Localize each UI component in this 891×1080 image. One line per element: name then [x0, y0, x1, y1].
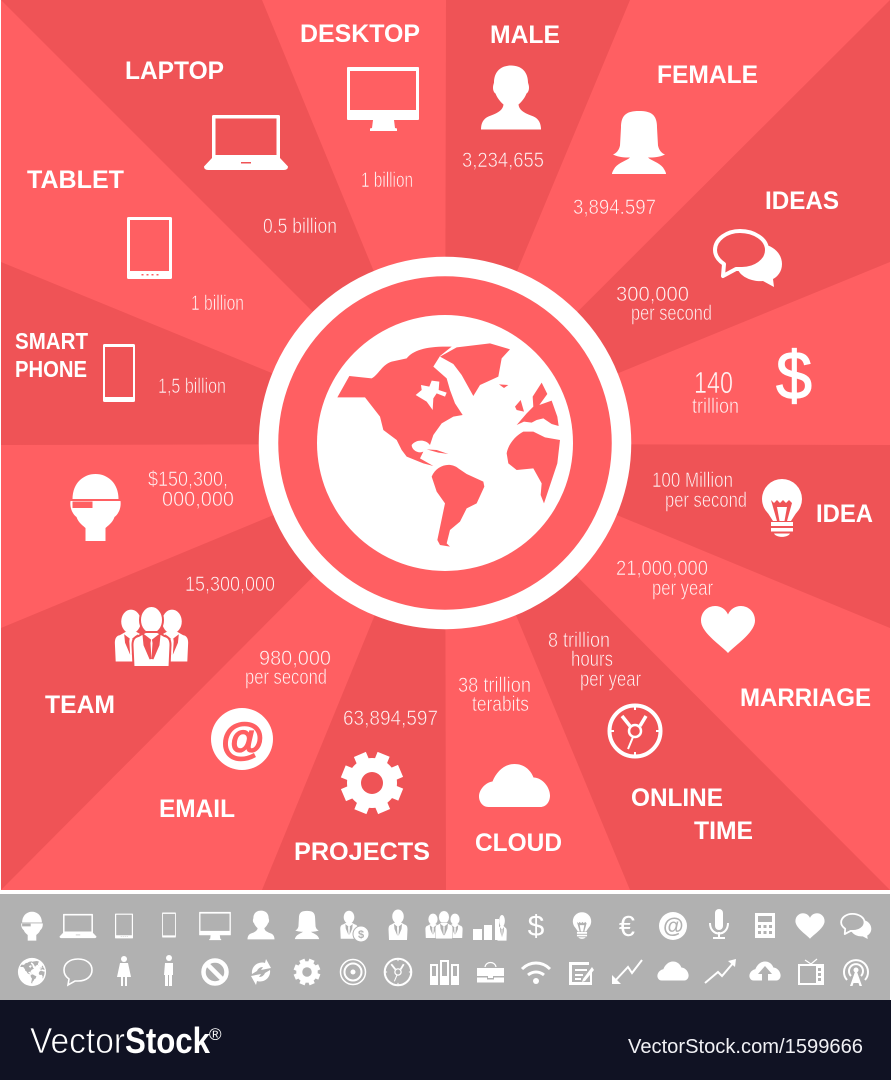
panel: smart phone — [15, 328, 226, 402]
footer logo: Vector — [30, 1020, 125, 1061]
value unit: ideas: per second — [631, 302, 712, 325]
value: online time: 8 trillion — [548, 629, 610, 652]
panel: female — [573, 61, 758, 219]
panel: email — [159, 647, 331, 823]
heading: ideas: IDEAS — [765, 187, 839, 215]
value: ideas: 300,000 — [616, 283, 689, 306]
icon: cloud — [479, 764, 550, 807]
value: desktop: 1 billion — [361, 169, 413, 192]
value: team: 15,300,000 — [185, 573, 275, 596]
footer image id: VectorStock.com/1599666 — [628, 1036, 863, 1058]
panel: online time — [548, 629, 753, 845]
heading: smart phone second line: PHONE — [15, 356, 87, 382]
icon: clock — [610, 706, 660, 756]
footer logo: Stock — [125, 1020, 211, 1061]
icon: laptop — [204, 115, 288, 170]
heading: time: TIME — [694, 817, 753, 845]
panel: marriage — [616, 557, 871, 712]
heading: team: TEAM — [45, 691, 115, 719]
heading: female: FEMALE — [657, 61, 758, 89]
icon row one: @ — [663, 915, 683, 938]
panel: projects — [294, 707, 438, 866]
icon row one: € — [619, 911, 635, 943]
central globe emblem — [268, 266, 622, 620]
panel: tablet — [27, 166, 244, 315]
value: cloud: 38 trillion — [458, 674, 531, 697]
icon: heart — [701, 606, 755, 653]
icon: light bulb — [762, 479, 802, 537]
panel: money — [692, 338, 812, 418]
value: email: 980,000 — [259, 647, 331, 670]
value: tablet: 1 billion — [191, 292, 244, 315]
heading: desktop: DESKTOP — [300, 20, 420, 48]
panel: male — [462, 21, 560, 172]
value unit: email: per second — [245, 666, 327, 689]
icon: dollar: $ — [776, 338, 812, 414]
value line three: online time: per year — [580, 668, 641, 691]
icon row one — [21, 909, 871, 943]
icon: desktop — [347, 67, 419, 131]
value: female: 3,894.597 — [573, 196, 656, 219]
icon row one: $ — [358, 929, 364, 941]
value: money: 140 — [694, 365, 733, 400]
footer logo: ® — [209, 1025, 222, 1044]
panel: idea — [652, 469, 873, 537]
icon: at sign: @ — [221, 715, 263, 764]
value: laptop: 0.5 billion — [263, 215, 337, 238]
icon row two — [18, 955, 868, 986]
value: marriage: 21,000,000 — [616, 557, 708, 580]
icon: team — [115, 606, 188, 667]
icon: male — [481, 66, 541, 130]
value unit: money: trillion — [692, 395, 739, 418]
value unit: marriage: per year — [652, 577, 713, 600]
icon: gear — [341, 752, 403, 814]
panel: icon set — [0, 894, 890, 1000]
heading: idea: IDEA — [816, 500, 873, 528]
icon row one: $ — [528, 910, 545, 943]
footer logo — [30, 1020, 222, 1061]
heading: cloud: CLOUD — [475, 829, 562, 857]
icon: female — [612, 111, 666, 174]
icon: smart phone — [103, 344, 135, 402]
panel: team — [45, 573, 275, 719]
panel: cloud — [458, 674, 562, 857]
panel: ideas — [616, 187, 839, 325]
icon: chat bubbles — [715, 231, 782, 287]
footer bar — [0, 1000, 891, 1080]
value: projects: 63,894,597 — [343, 707, 438, 730]
heading: tablet: TABLET — [27, 166, 124, 194]
icon: at sign — [211, 708, 273, 770]
heading: marriage: MARRIAGE — [740, 684, 871, 712]
value: idea: 100 Million — [652, 469, 733, 492]
value: male: 3,234,655 — [462, 149, 544, 172]
value: wearable: $150,300, — [148, 468, 228, 491]
heading: projects: PROJECTS — [294, 838, 430, 866]
heading: male: MALE — [490, 21, 560, 49]
icon: smart glasses head — [70, 474, 121, 541]
panel: wearable — [70, 468, 234, 541]
value line two: online time: hours — [571, 648, 613, 671]
heading: online: ONLINE — [631, 784, 723, 812]
panel: laptop — [125, 57, 337, 238]
heading: smart phone: SMART — [15, 328, 88, 354]
panel: desktop — [300, 20, 420, 192]
heading: laptop: LAPTOP — [125, 57, 224, 85]
value: smart phone: 1,5 billion — [158, 375, 226, 398]
value unit: idea: per second — [665, 489, 747, 512]
heading: email: EMAIL — [159, 795, 235, 823]
value unit: cloud: terabits — [472, 693, 529, 716]
value line two: wearable: 000,000 — [162, 488, 234, 511]
divider strip — [0, 890, 891, 894]
icon: tablet — [127, 217, 172, 279]
